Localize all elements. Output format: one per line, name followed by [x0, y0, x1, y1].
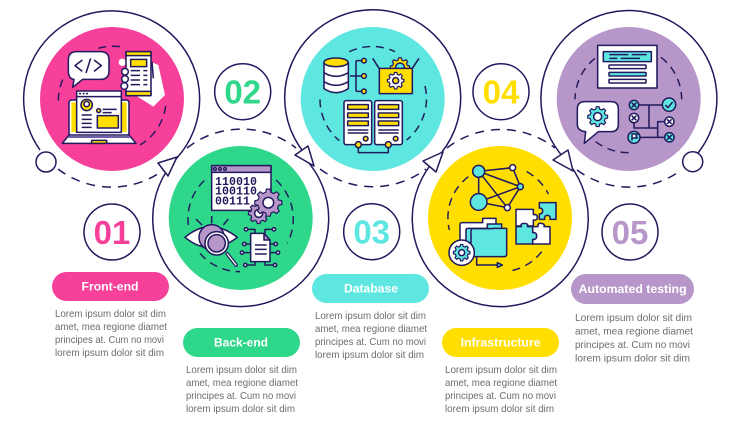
- text: front-end description: amet, mea regione diamet: [55, 322, 167, 333]
- text: back-end description: Lorem ipsum dolor sit dim: [186, 365, 297, 376]
- number badge 05: [602, 204, 658, 260]
- text: back-end description: amet, mea regione diamet: [186, 378, 298, 389]
- connector rings and arrows: [24, 10, 717, 307]
- text: automated testing description: amet, mea regione diamet: [575, 326, 693, 338]
- number badge 01: [84, 204, 140, 260]
- text: front-end description: Lorem ipsum dolor sit dim: [55, 309, 166, 320]
- arrow 1 to 2: [158, 157, 177, 176]
- text: automated testing description: lorem ipsum dolor sit dim: [575, 354, 690, 364]
- icon: test form and flow: [575, 45, 682, 153]
- label: automated testing: [571, 274, 694, 304]
- text: back-end description: principes at. Cum no movi: [186, 391, 296, 402]
- text: back-end description: lorem ipsum dolor sit dim: [186, 404, 295, 415]
- text: database description: principes at. Cum no movi: [315, 337, 426, 348]
- label: front-end: Front-end: [82, 280, 138, 294]
- label: front-end: [52, 272, 169, 301]
- panel: front-end circle: [40, 27, 184, 171]
- end node: [683, 152, 703, 172]
- label: database: [312, 274, 429, 303]
- text: front-end description: lorem ipsum dolor sit dim: [55, 348, 164, 359]
- icon: binary code and inspection: 00111: [215, 194, 250, 208]
- text: database description: amet, mea regione diamet: [315, 324, 427, 335]
- label: infrastructure: Infrastructure: [461, 336, 541, 350]
- text: back-end description: [186, 365, 298, 415]
- text: automated testing description: [575, 313, 693, 364]
- number badge 04: [473, 64, 529, 120]
- text: database description: [315, 311, 427, 361]
- number badge 03: [344, 204, 400, 260]
- arrow 3 to 4: [423, 152, 443, 172]
- text: infrastructure description: principes at. Cum no movi: [445, 391, 556, 402]
- label: back-end: [183, 328, 300, 357]
- panel: back-end circle: [169, 146, 313, 290]
- number badge 03: 03: [353, 214, 390, 250]
- text: front-end description: principes at. Cum no movi: [55, 335, 164, 346]
- arrow 4 to 5: [553, 150, 573, 171]
- panel: database circle: [301, 27, 445, 171]
- icon: web and mobile code: [58, 46, 166, 145]
- label: database: Database: [344, 282, 398, 296]
- text: infrastructure description: lorem ipsum dolor sit dim: [445, 404, 554, 415]
- text: automated testing description: principes at. Cum no movi: [575, 340, 690, 351]
- number badge 05: 05: [612, 214, 648, 251]
- text: infrastructure description: amet, mea regione diamet: [445, 378, 557, 389]
- text: front-end description: [55, 309, 167, 359]
- text: infrastructure description: [445, 365, 557, 415]
- label: infrastructure: [442, 328, 559, 357]
- number badge 02: 02: [224, 74, 261, 110]
- icon: database and servers: [320, 47, 426, 153]
- text: infrastructure description: Lorem ipsum dolor sit dim: [445, 365, 557, 376]
- number badge 04: 04: [483, 74, 520, 110]
- label: automated testing: Automated testing: [579, 282, 687, 296]
- panel: automated testing circle: [557, 27, 701, 171]
- label: back-end: Back-end: [214, 336, 268, 350]
- arrow 2 to 3: [295, 146, 314, 166]
- number badge 02: [215, 64, 271, 120]
- icon: binary code and inspection: 110010: [215, 175, 257, 189]
- icon: network, folders and puzzle: [448, 165, 556, 271]
- text: automated testing description: Lorem ipsum dolor sit dim: [575, 313, 692, 324]
- icon: binary code and inspection: 100110: [215, 185, 257, 199]
- text: database description: Lorem ipsum dolor sit dim: [315, 311, 426, 322]
- icon: binary code and inspection: [185, 166, 293, 272]
- start node: [36, 152, 56, 172]
- text: database description: lorem ipsum dolor sit dim: [315, 350, 424, 361]
- number badge 01: 01: [94, 214, 130, 251]
- panel: infrastructure circle: [428, 146, 572, 290]
